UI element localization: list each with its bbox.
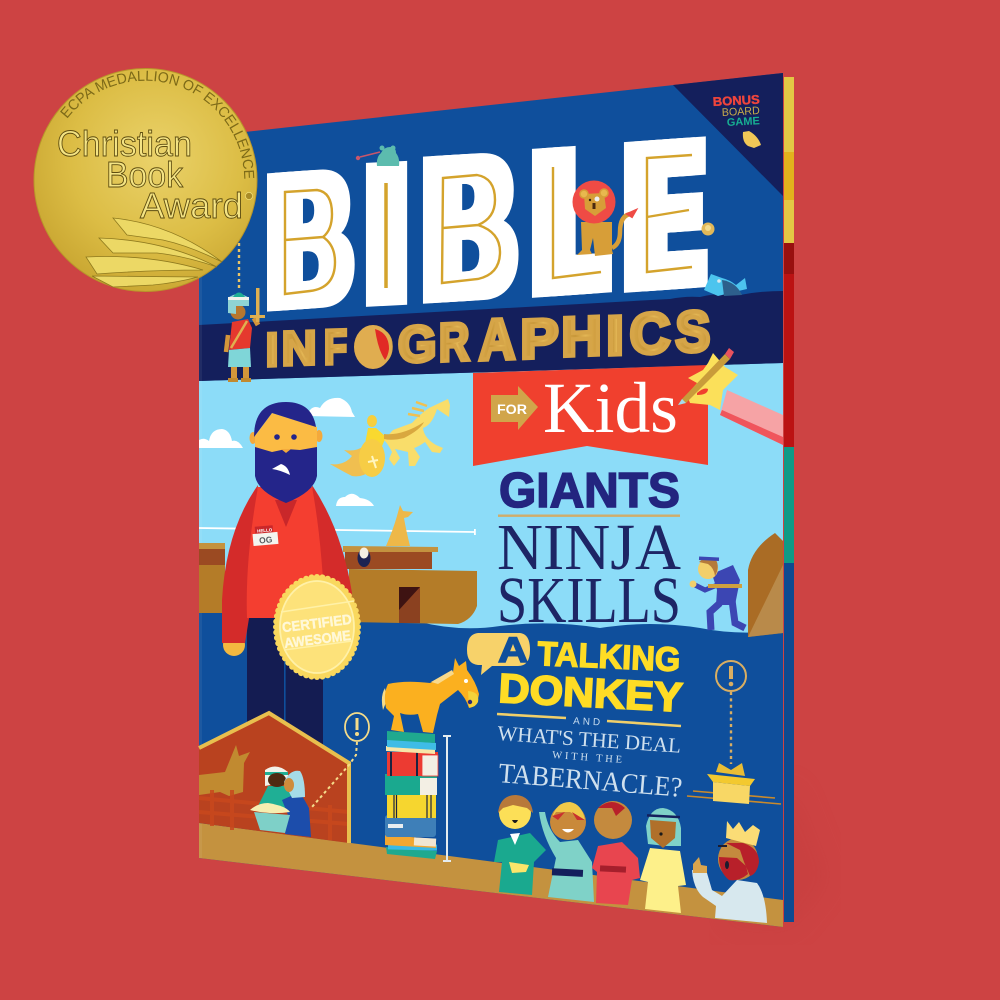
mary	[282, 792, 311, 837]
red book with pages	[387, 752, 438, 776]
callout: exclamation and dashes	[312, 713, 369, 807]
head	[230, 304, 246, 320]
chariot body	[359, 439, 385, 477]
penguin	[358, 549, 370, 567]
exclamation icon	[716, 661, 746, 691]
cream strip	[386, 746, 435, 754]
subtitle: INFOGRAPHICS: S	[676, 299, 710, 364]
text: tabernacle: TABERNACLE?	[497, 758, 683, 804]
character: red robe	[592, 801, 640, 905]
title: BIBLE: E	[643, 103, 707, 325]
title: BIBLE: L	[530, 114, 590, 329]
body	[385, 658, 479, 733]
rock	[748, 533, 783, 637]
eyes	[274, 434, 280, 440]
award name: Christian	[57, 123, 192, 164]
tunic	[229, 319, 252, 350]
title: BIBLE: E	[622, 104, 686, 327]
award medal	[34, 68, 258, 292]
speech bubble A	[467, 631, 530, 675]
joseph	[258, 786, 292, 812]
fence	[199, 790, 349, 840]
door	[399, 587, 420, 623]
giraffe	[386, 505, 413, 546]
award name: Award	[140, 185, 243, 226]
subtitle: INFOGRAPHICS: O	[355, 319, 393, 376]
page edges of the book	[784, 77, 794, 922]
sword	[708, 584, 742, 588]
medal disc	[34, 68, 257, 292]
title: BIBLE: B	[434, 112, 522, 343]
subtitle: INFOGRAPHICS: A	[479, 307, 515, 372]
crown	[726, 821, 760, 846]
title: BIBLE: L	[540, 113, 600, 328]
gold coin	[702, 222, 714, 236]
gold inlines of the title	[285, 155, 692, 294]
horse	[384, 399, 450, 466]
hand	[687, 353, 738, 410]
name tag	[253, 525, 278, 546]
title: BIBLE: B	[277, 129, 358, 347]
collar	[275, 500, 297, 527]
headline: donkey: DONKEY	[498, 665, 684, 721]
tail	[612, 214, 630, 248]
bonus board game label: BONUS	[712, 93, 760, 109]
muzzle	[468, 691, 478, 707]
body	[712, 565, 740, 605]
title: BIBLE: E	[632, 103, 696, 326]
mouth	[272, 464, 290, 475]
face	[584, 193, 606, 216]
clouds	[199, 398, 374, 506]
subtitle: INFOGRAPHICS	[266, 299, 710, 376]
badge: certified awesome: CERTIFIED	[281, 611, 352, 635]
subtitle: INFOGRAPHICS: N	[282, 322, 316, 376]
orange book	[385, 835, 436, 848]
subtitle: INFOGRAPHICS: F	[324, 321, 347, 375]
face	[255, 413, 317, 460]
name tag: HELLO	[257, 527, 273, 534]
gold rule	[498, 514, 680, 517]
rules around and: AND	[573, 716, 600, 728]
donkey on books	[382, 658, 479, 733]
rim text: ECPA MEDALLION OF EXCELLENCE	[60, 70, 254, 179]
flames	[330, 446, 372, 476]
teal top	[387, 731, 435, 743]
stable outline	[199, 713, 349, 843]
text: what's the deal: WHAT'S THE DEAL	[497, 721, 682, 758]
lion	[572, 180, 636, 256]
subtitle: INFOGRAPHICS: I	[266, 323, 278, 376]
kids: Kids	[543, 368, 678, 448]
teal bottom	[386, 847, 437, 859]
badge: certified awesome: AWESOME	[283, 627, 352, 651]
ark	[199, 505, 477, 624]
fish jumping	[704, 274, 747, 296]
banner: for kids	[473, 365, 708, 466]
frog on the letter I	[356, 146, 399, 166]
hand drawing with pencil	[678, 348, 783, 445]
cover base blue	[199, 73, 783, 927]
mane	[572, 180, 616, 224]
text: with the: WITH THE	[552, 750, 622, 766]
poles	[687, 791, 781, 804]
arm	[695, 583, 722, 590]
arm with sword	[254, 318, 258, 325]
headline: ninja: NINJA	[497, 511, 681, 584]
headline: skills: SKILLS	[497, 564, 681, 637]
beard	[255, 447, 317, 503]
bonus board game label: GAME	[727, 115, 760, 129]
name tag: OG	[259, 534, 273, 546]
body	[692, 870, 767, 923]
subtitle: INFOGRAPHICS: G	[398, 315, 436, 373]
badge: certified awesome	[276, 577, 358, 677]
legs	[710, 600, 745, 630]
title: BIBLE	[262, 103, 707, 348]
bonus board game label: BOARD	[722, 105, 760, 119]
thumb	[693, 857, 707, 873]
hair	[726, 843, 759, 876]
teal book with pages	[385, 774, 437, 795]
title: BIBLE: I	[362, 129, 411, 339]
registered mark	[245, 192, 253, 200]
navy title band	[199, 291, 783, 381]
height ruler	[443, 735, 451, 862]
pie chart inside the letter O	[354, 325, 392, 369]
driver	[367, 415, 377, 427]
beard	[719, 857, 748, 880]
corner triangle	[673, 73, 783, 196]
headline: giants: GIANTS	[499, 464, 680, 518]
hands	[223, 634, 245, 656]
headline: talking: TALKING	[537, 635, 681, 679]
arms	[222, 485, 258, 643]
manger scene	[199, 713, 349, 843]
chariot of fire	[330, 399, 450, 477]
donkey silhouette	[199, 745, 250, 796]
award name: Book	[106, 154, 184, 195]
character: mint robe waving	[539, 802, 594, 902]
stack of books	[385, 731, 438, 859]
helmet	[228, 294, 249, 314]
hair	[254, 402, 316, 437]
award name	[57, 123, 243, 226]
dotted line	[238, 243, 240, 289]
blue book	[387, 739, 436, 750]
hull	[199, 565, 225, 613]
torso	[247, 487, 325, 618]
title: BIBLE: B	[426, 112, 513, 343]
icon: game piece	[743, 131, 761, 148]
body	[577, 222, 613, 256]
arrow: for: FOR	[497, 402, 527, 417]
arrow: for	[491, 386, 538, 430]
stable	[199, 713, 349, 843]
book cover	[199, 73, 783, 927]
sky	[199, 363, 783, 633]
ark box	[713, 782, 750, 804]
subtitle: INFOGRAPHICS: R	[439, 313, 469, 373]
legs	[231, 364, 237, 380]
manger	[254, 812, 290, 833]
head	[698, 559, 718, 579]
subtitle: INFOGRAPHICS: I	[606, 304, 624, 367]
subtitle: INFOGRAPHICS: C	[630, 301, 670, 366]
blue strip	[388, 843, 437, 851]
legs	[247, 616, 323, 746]
ground	[199, 823, 783, 927]
bonus board game label	[712, 93, 761, 148]
soldier	[226, 243, 265, 382]
rules around and	[497, 714, 681, 728]
pencil	[678, 354, 730, 405]
character: green boy	[494, 795, 546, 895]
floor shadow	[720, 780, 830, 930]
yellow book	[387, 792, 436, 818]
nose	[281, 449, 291, 453]
tail	[382, 688, 387, 710]
cabin	[199, 549, 225, 565]
head	[718, 838, 758, 880]
steel blue books	[385, 815, 436, 837]
mane	[431, 670, 454, 684]
title: BIBLE: B	[262, 130, 342, 348]
subtitle: INFOGRAPHICS: P	[520, 307, 559, 370]
character: Og the giant	[222, 402, 352, 746]
speech bubble A: A	[498, 631, 528, 670]
subtitle: INFOGRAPHICS: H	[562, 305, 602, 368]
ninja figure	[690, 556, 745, 630]
ears	[250, 432, 256, 444]
character: king	[692, 821, 767, 923]
title: BIBLE: L	[550, 112, 610, 327]
wing stripes	[86, 218, 222, 287]
title: BIBLE: B	[417, 113, 505, 344]
sleeve	[720, 390, 783, 445]
ark of the covenant callout	[687, 661, 781, 804]
upper deck planks	[199, 543, 225, 550]
spine hinge	[199, 140, 202, 858]
title: BIBLE: B	[270, 130, 350, 348]
rope line	[199, 528, 474, 532]
character: yellow robe	[640, 808, 686, 913]
hole between fingers	[697, 388, 708, 395]
